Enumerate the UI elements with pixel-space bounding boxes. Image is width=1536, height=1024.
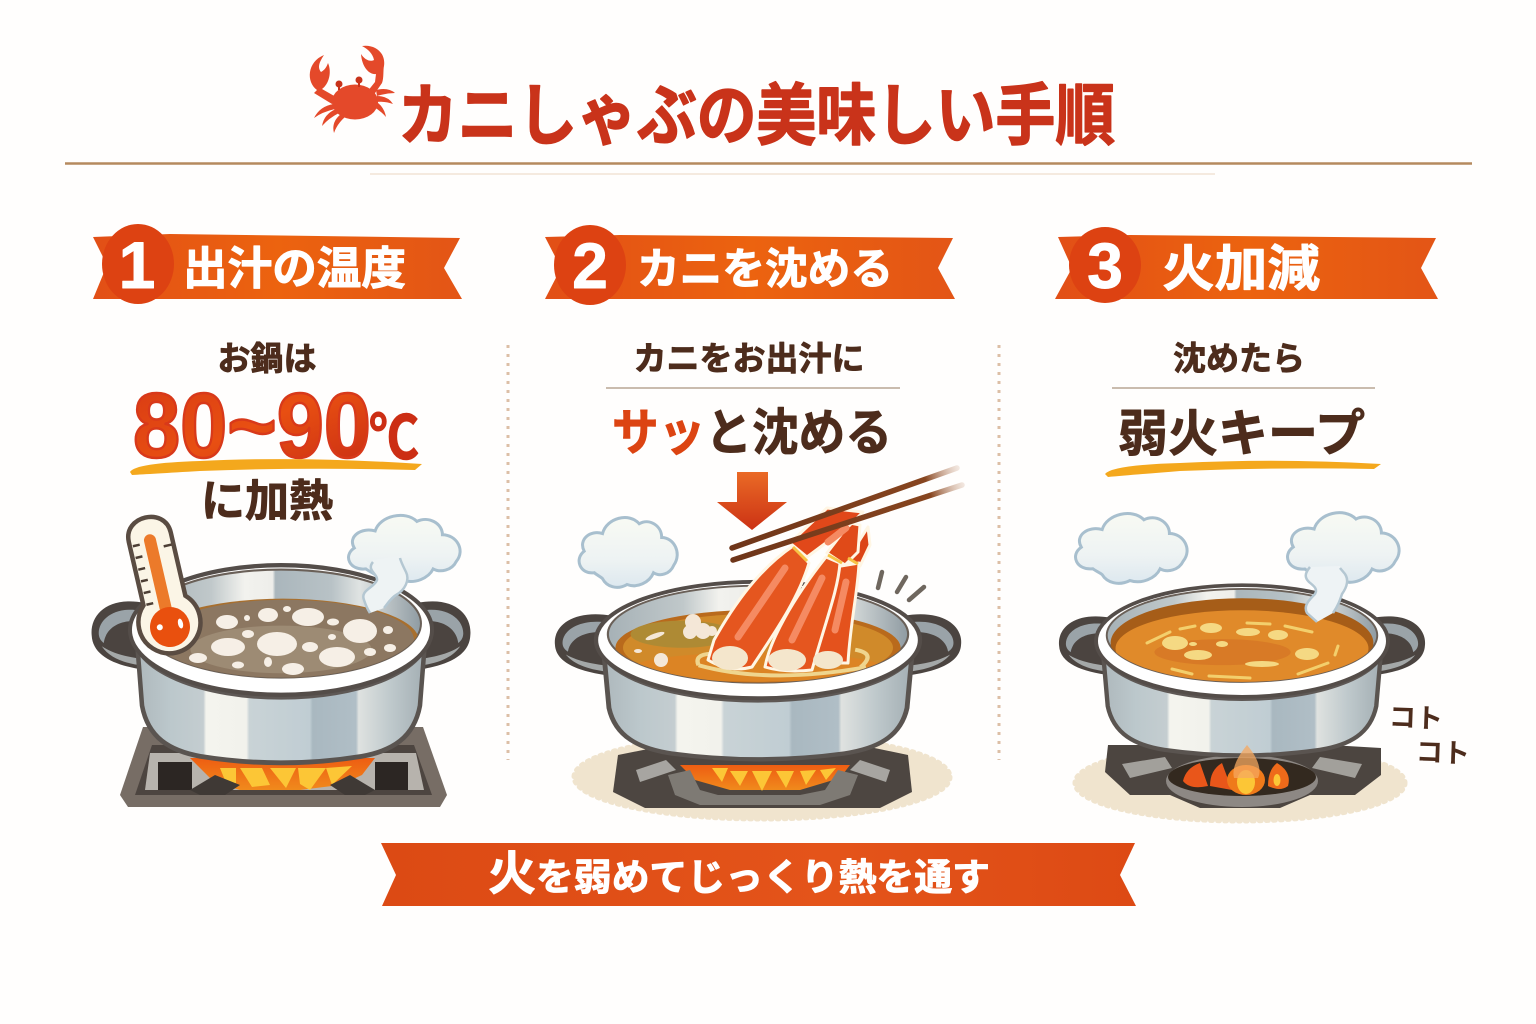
step 1 ribbon: 1: [119, 228, 155, 302]
underline brush: [130, 459, 422, 475]
step 2 ribbon: 2: [572, 230, 608, 302]
stove 3: [1075, 745, 1405, 821]
steam 3 right: [1288, 513, 1399, 622]
broth: [1111, 598, 1373, 688]
boiling bubbles: [189, 606, 396, 675]
step 2 ribbon: カニを沈める: [637, 235, 893, 297]
arrow: down: [717, 472, 787, 530]
step 3 ribbon: 3: [1087, 230, 1123, 302]
pot 3: [1059, 585, 1425, 755]
icon: thermometer: [115, 511, 207, 660]
icon: crab legs: [708, 508, 870, 671]
text: heat: に加熱: [201, 465, 333, 529]
text: into broth: カニをお出汁に: [634, 332, 864, 380]
stove 2: [574, 735, 950, 819]
temperature: 80~90: [133, 375, 371, 477]
flame glow: [1233, 745, 1260, 778]
fat droplets: [1162, 623, 1319, 667]
text: simmer sound: [1388, 695, 1471, 771]
icon: crab: [310, 46, 395, 133]
dividers: [506, 345, 510, 760]
text: simmer sound: コト: [1388, 695, 1444, 736]
flames: [680, 765, 850, 790]
text: simmer sound: コト: [1415, 730, 1471, 771]
step 3 ribbon: [1055, 227, 1438, 303]
panel: step 1: [92, 224, 470, 807]
action lines: [878, 572, 924, 600]
broth: [615, 610, 901, 686]
title header: [65, 46, 1472, 174]
pot 2: [555, 582, 961, 759]
step 1 ribbon: 出汁の温度: [183, 232, 406, 297]
flames: [1183, 763, 1232, 790]
flames: [190, 758, 375, 790]
panel: step 3: [1055, 227, 1471, 821]
stove 1: [120, 727, 447, 807]
bottom banner: 火を弱めてじっくり熱を通す: [488, 835, 990, 904]
title text: カニしゃぶの美味しい手順: [398, 62, 1115, 159]
panel: step 2: [545, 225, 962, 819]
steam 3 left: [1076, 514, 1187, 583]
text: quickly submerge: サッと沈める: [612, 393, 892, 465]
step 2 ribbon: [545, 225, 955, 305]
broth foam: [634, 614, 717, 667]
broth: [168, 598, 418, 678]
bottom banner: [381, 835, 1136, 906]
step 1 ribbon: [93, 224, 462, 304]
step 3 ribbon: 火加減: [1162, 229, 1320, 301]
steam 1: [349, 515, 460, 613]
text: pot instruction: お鍋は: [218, 332, 316, 380]
temperature: ℃: [369, 390, 419, 477]
text: once submerged: 沈めたら: [1173, 332, 1305, 380]
text: low heat: 弱火キープ: [1118, 394, 1365, 466]
steam 2: [579, 518, 677, 587]
underline brush: [1105, 461, 1381, 477]
pot 1: [92, 565, 470, 763]
chopsticks: [732, 468, 962, 560]
